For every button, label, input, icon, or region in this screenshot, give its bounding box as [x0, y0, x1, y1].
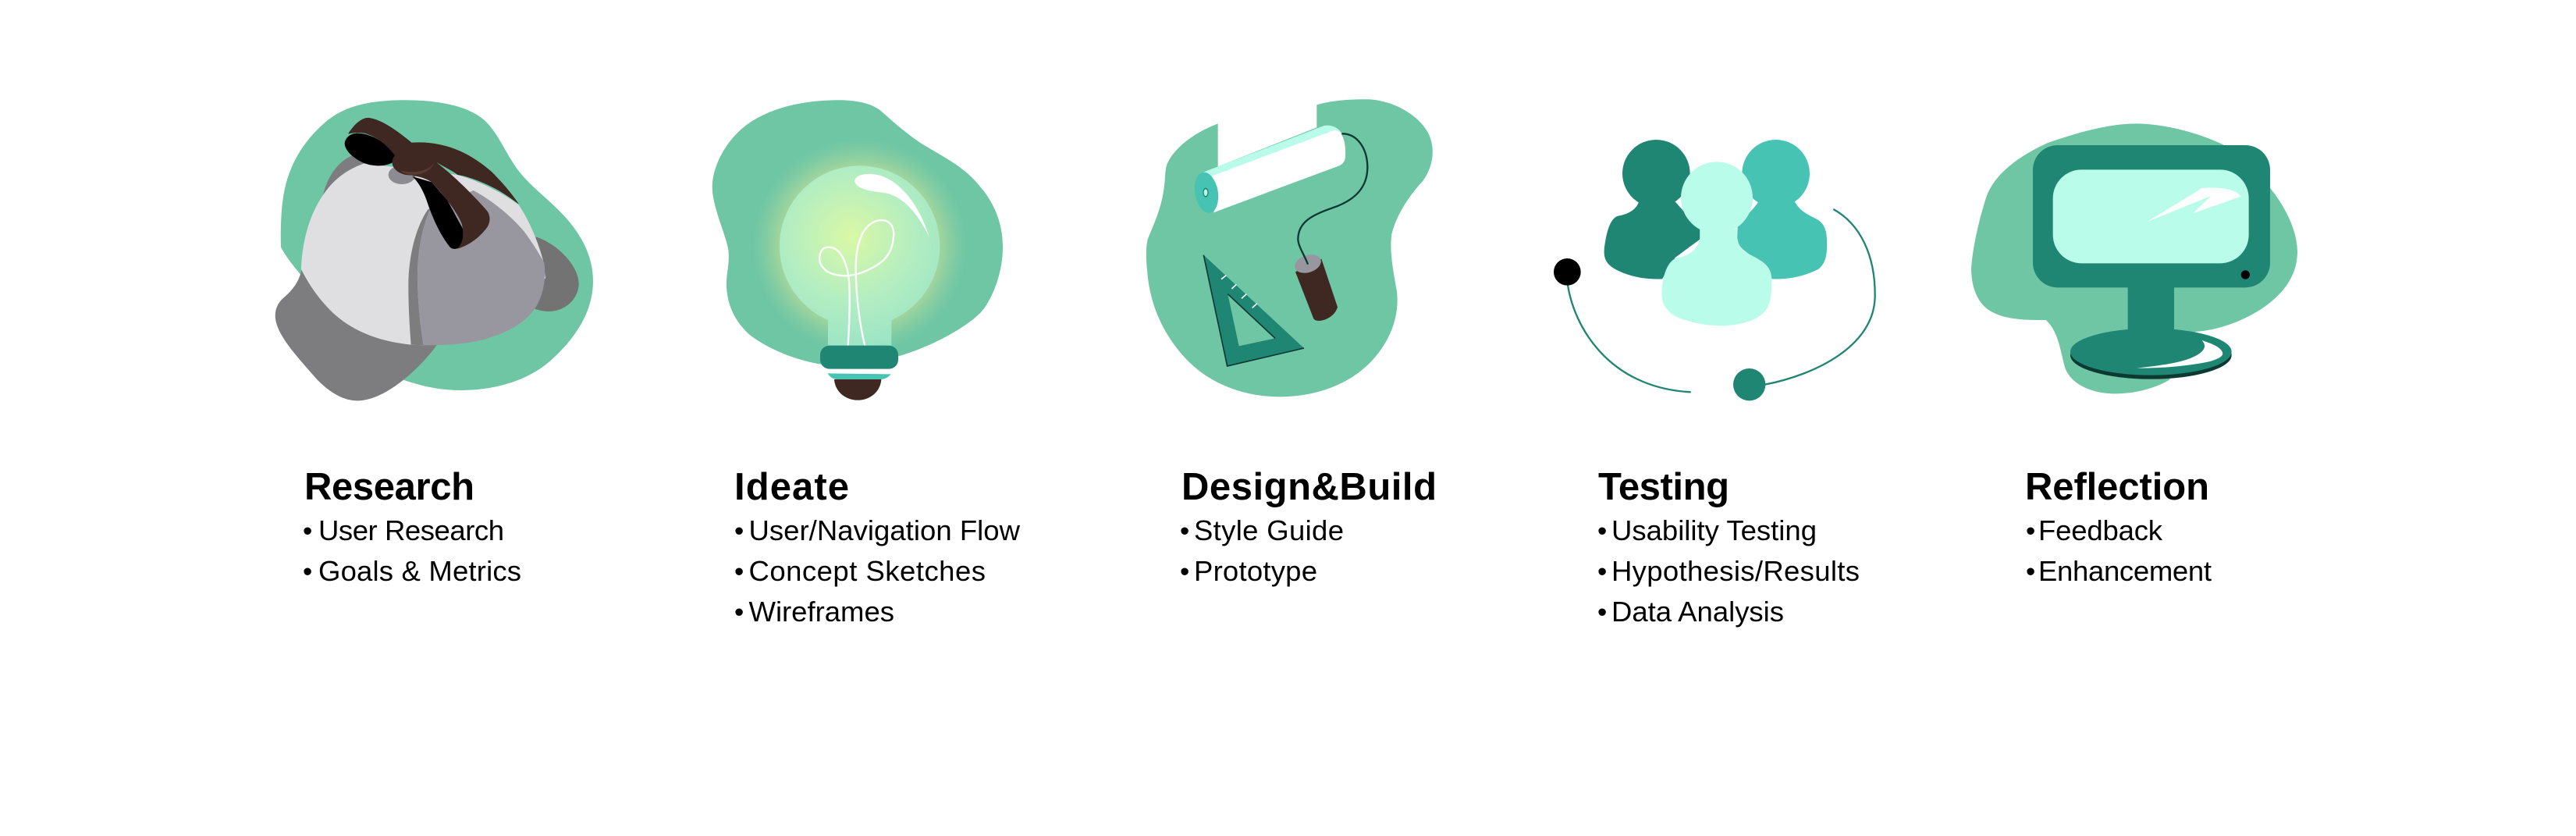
- front user: [1661, 162, 1771, 326]
- icon: research detective hat: [275, 100, 593, 400]
- design background blob: [1146, 99, 1433, 397]
- hat gray panel: [417, 190, 545, 345]
- list item: Usability Testing: [1611, 514, 1817, 546]
- roller axle: [1203, 188, 1209, 197]
- research background blob: [281, 100, 593, 390]
- monitor base highlight: [2137, 340, 2222, 368]
- band shadow: [439, 162, 519, 205]
- list item: Prototype: [1194, 555, 1317, 587]
- list item: •: [734, 557, 744, 587]
- screen glare: [2148, 188, 2241, 222]
- heading: reflection: Reflection: [2025, 466, 2209, 508]
- bulb contact tip: [834, 379, 881, 400]
- list item: Concept Sketches: [749, 555, 986, 587]
- bow lower tail: [412, 162, 490, 249]
- monitor base: [2070, 329, 2232, 375]
- dark user: [1604, 140, 1700, 279]
- monitor frame: [2033, 145, 2270, 287]
- hat ear flap: [533, 237, 579, 311]
- list item: •: [303, 557, 312, 587]
- ideate background blob: [712, 100, 1003, 365]
- monitor neck: [2128, 283, 2174, 336]
- list item: •: [734, 597, 744, 628]
- text block: ideate: [734, 466, 1021, 628]
- set square ticks: [1221, 276, 1257, 308]
- bow crease: [400, 162, 435, 175]
- hat brim: [275, 269, 437, 400]
- icon: ideate light bulb: [712, 100, 1003, 400]
- list item: •: [2026, 516, 2035, 546]
- list item: Enhancement: [2038, 555, 2212, 587]
- bulb glass: [780, 165, 940, 349]
- text block: reflection: [2025, 466, 2212, 587]
- list item: User/Navigation Flow: [749, 514, 1021, 546]
- roller top edge: [1203, 126, 1342, 187]
- bow band and knot: [393, 142, 519, 205]
- list item: •: [734, 516, 744, 546]
- set square edges: [1203, 255, 1304, 366]
- list item: •: [1597, 597, 1607, 628]
- bulb filament: [819, 220, 894, 346]
- heading: research: Research: [304, 466, 474, 508]
- left arc: [1568, 285, 1691, 392]
- teal node: [1733, 368, 1765, 400]
- roller axle centre: [1204, 189, 1207, 196]
- hat seam: [408, 208, 431, 345]
- icon: testing users: [1554, 140, 1875, 400]
- list item: •: [1180, 557, 1189, 587]
- text block: testing: [1597, 466, 1860, 628]
- list item: User Research: [318, 514, 504, 546]
- list item: •: [303, 516, 312, 546]
- roller body: [1211, 130, 1345, 212]
- heading: ideate: Ideate: [734, 466, 849, 508]
- roller handle grip: [1295, 259, 1338, 321]
- power light: [2241, 270, 2250, 279]
- heading: design and build: Design&Build: [1181, 466, 1437, 508]
- list item: •: [1180, 516, 1189, 546]
- bulb base collar: [820, 346, 898, 369]
- black node: [1554, 258, 1581, 286]
- hat back panel: [322, 155, 367, 197]
- monitor screen: [2053, 169, 2249, 263]
- list item: •: [2026, 557, 2035, 587]
- right arc: [1765, 209, 1875, 385]
- roller wire: [1298, 133, 1367, 265]
- roller grip cap: [1292, 251, 1324, 276]
- hat light dome: [301, 163, 545, 345]
- list item: •: [1597, 557, 1607, 587]
- text block: design and build: [1180, 466, 1437, 587]
- reflection background blob: [1971, 123, 2297, 393]
- bow left loop: [348, 118, 432, 156]
- list item: Hypothesis/Results: [1611, 555, 1860, 587]
- set square: [1203, 255, 1304, 366]
- icon: design paint roller and set square: [1146, 99, 1433, 397]
- bow lower tail shadow: [412, 176, 464, 249]
- bulb highlight: [855, 174, 929, 237]
- heading: testing: Testing: [1598, 466, 1729, 508]
- list item: Wireframes: [749, 596, 894, 628]
- teal user: [1737, 140, 1827, 279]
- bulb glow: [759, 145, 961, 341]
- list item: Feedback: [2038, 514, 2163, 546]
- roller end cap: [1192, 170, 1221, 215]
- list item: Goals & Metrics: [318, 555, 521, 587]
- list item: Data Analysis: [1611, 596, 1784, 628]
- icon: reflection monitor: [1971, 123, 2297, 393]
- monitor base shadow: [2070, 331, 2232, 379]
- text block: research: [303, 466, 521, 587]
- bulb teal ring: [828, 373, 891, 379]
- bow left loop shadow: [345, 133, 396, 165]
- list item: •: [1597, 516, 1607, 546]
- list item: Style Guide: [1194, 514, 1344, 546]
- hat button: [389, 165, 415, 184]
